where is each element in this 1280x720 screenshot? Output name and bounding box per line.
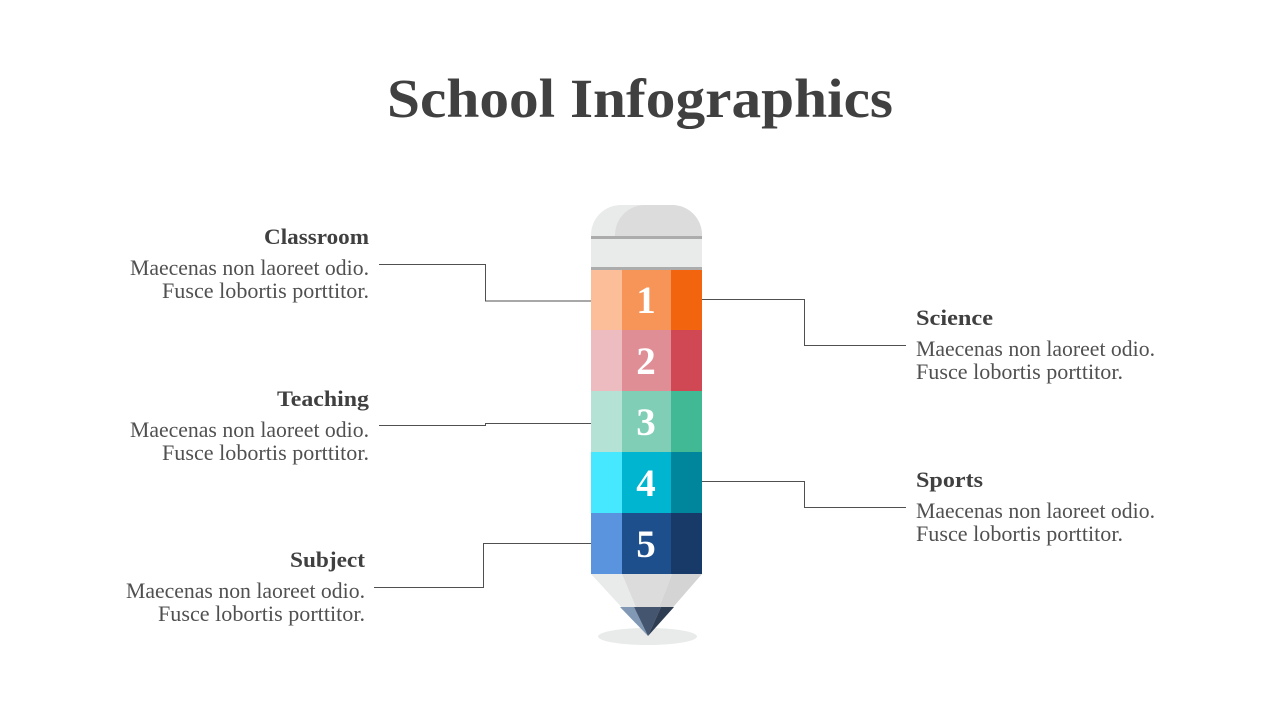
pencil shadow xyxy=(598,628,697,645)
text block: science: Science xyxy=(916,305,993,330)
connector: teaching xyxy=(379,424,591,426)
connector: classroom xyxy=(379,264,591,301)
segment 1 xyxy=(591,270,702,330)
segment 2 xyxy=(591,330,702,391)
segment 4: 4 xyxy=(636,462,656,505)
text block: classroom xyxy=(130,224,369,303)
text block: teaching xyxy=(130,386,370,465)
text block: teaching: Fusce lobortis porttitor. xyxy=(162,440,369,465)
segment 2: 2 xyxy=(636,340,656,383)
segment 1: 1 xyxy=(636,279,656,322)
segment 3 xyxy=(591,391,702,452)
text block: sports: Sports xyxy=(916,467,983,492)
text block: classroom: Fusce lobortis porttitor. xyxy=(162,278,369,303)
pencil tip xyxy=(591,574,702,636)
text block: classroom: Maecenas non laoreet odio. xyxy=(130,255,369,280)
text block: science: Maecenas non laoreet odio. xyxy=(916,336,1155,361)
connector: science xyxy=(702,300,906,346)
segment 5 xyxy=(591,513,702,574)
text block: teaching: Maecenas non laoreet odio. xyxy=(130,417,369,442)
text block: classroom: Classroom xyxy=(264,224,369,249)
pencil illustration xyxy=(591,205,702,645)
segment 3: 3 xyxy=(636,401,656,444)
segment 4 xyxy=(591,452,702,513)
text block: subject: Subject xyxy=(290,547,366,572)
text block: science: Fusce lobortis porttitor. xyxy=(916,359,1123,384)
text block: subject: Fusce lobortis porttitor. xyxy=(158,601,365,626)
text block: sports: Maecenas non laoreet odio. xyxy=(916,498,1155,523)
text block: teaching: Teaching xyxy=(277,386,370,411)
text block: subject xyxy=(126,547,366,626)
segment 5: 5 xyxy=(636,523,656,566)
text block: subject: Maecenas non laoreet odio. xyxy=(126,578,365,603)
text block: sports: Fusce lobortis porttitor. xyxy=(916,521,1123,546)
text block: sports xyxy=(916,467,1155,546)
eraser xyxy=(591,205,702,270)
text block: science xyxy=(916,305,1155,384)
connector: sports xyxy=(702,482,906,508)
title: School Infographics xyxy=(387,68,893,129)
connector: subject xyxy=(374,544,591,588)
